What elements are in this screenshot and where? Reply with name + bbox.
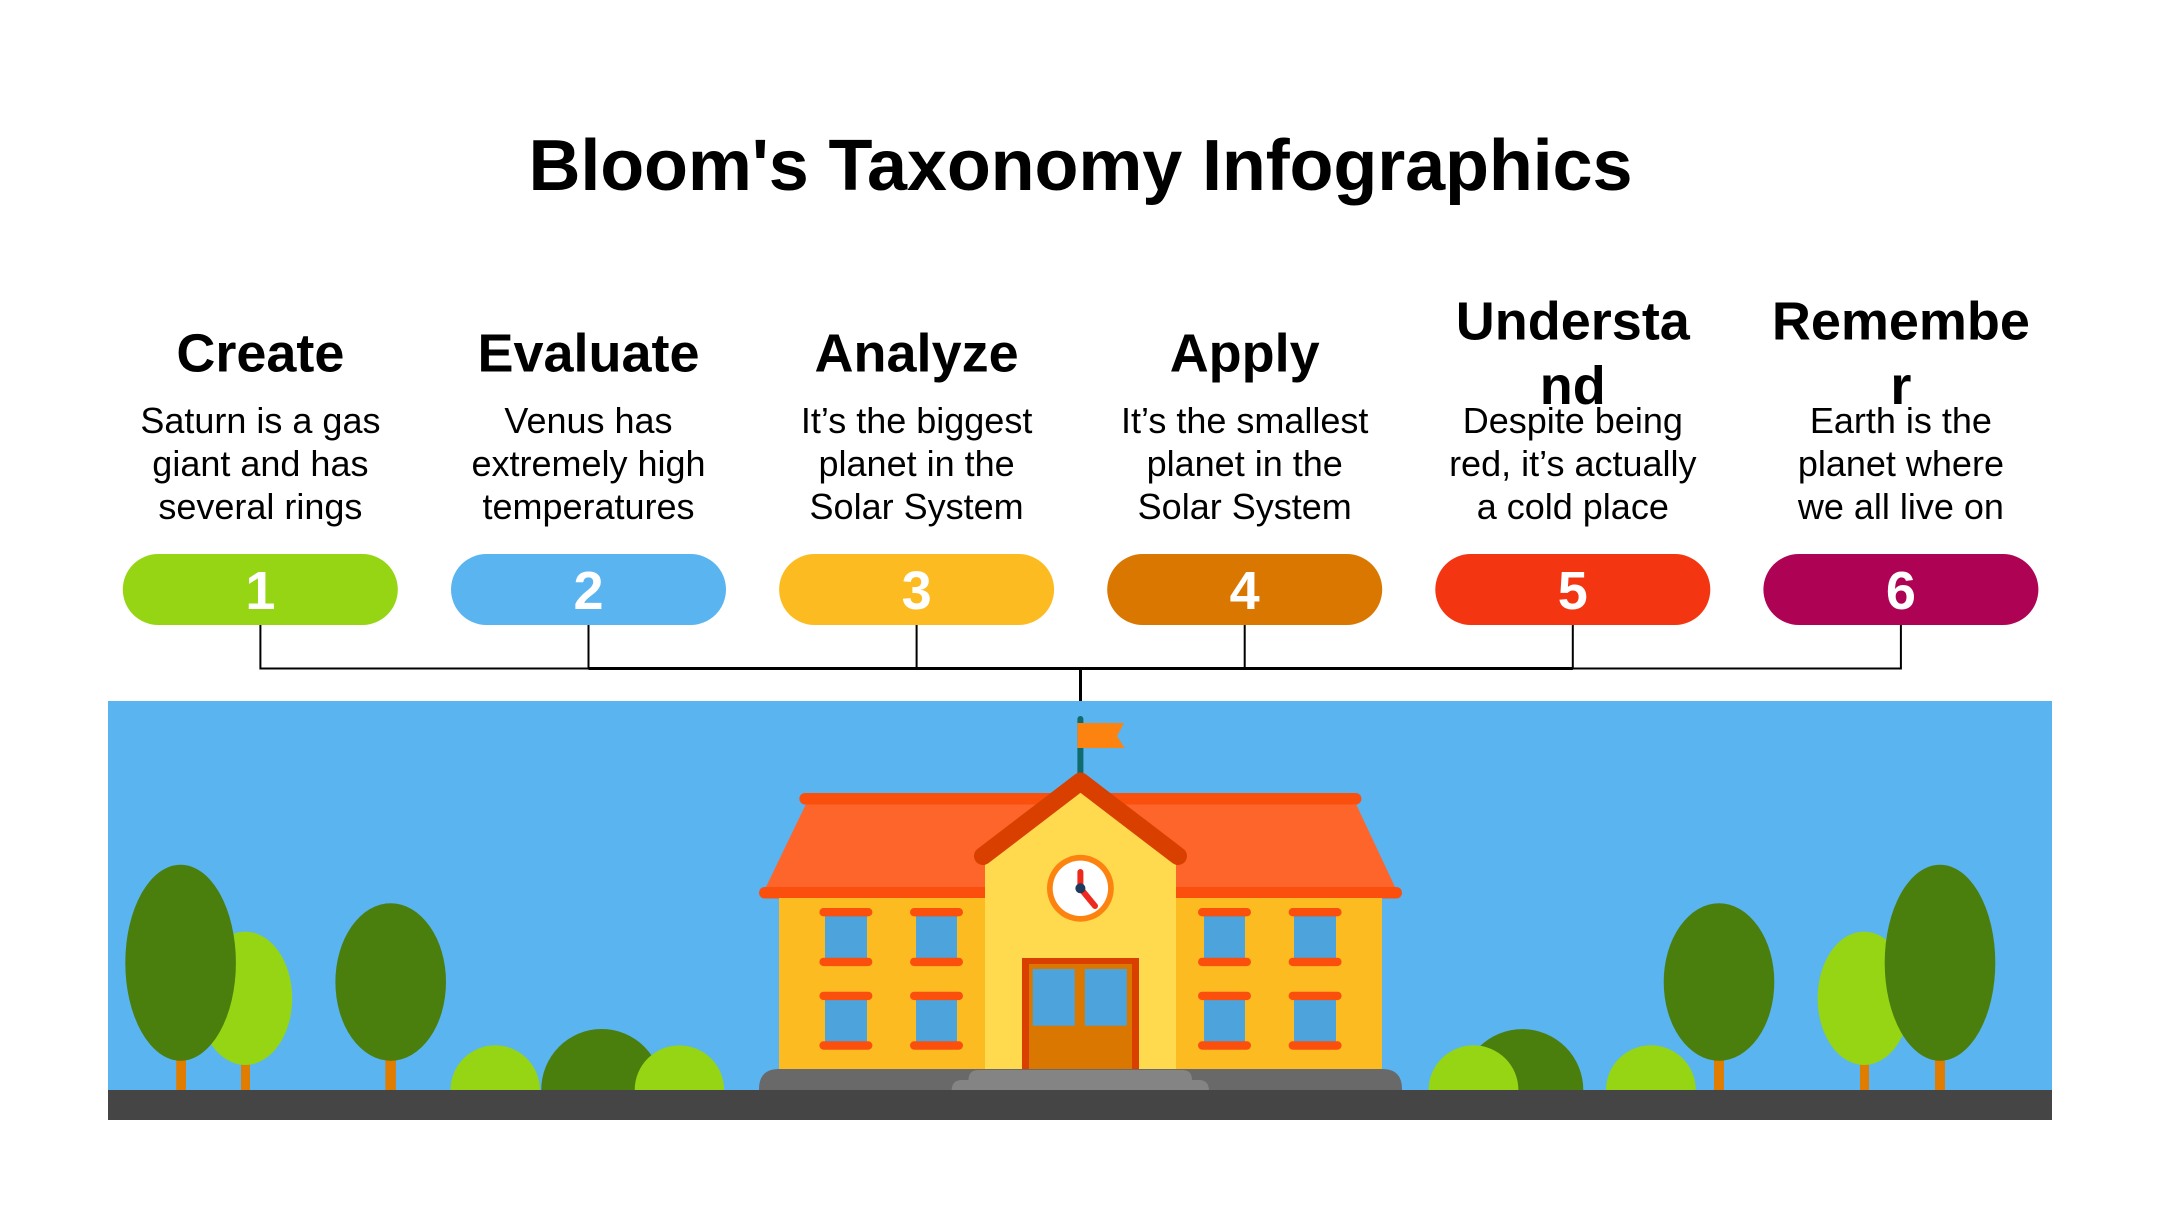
number pill 2 — [451, 554, 726, 625]
number pill 5: 5 — [1558, 561, 1588, 621]
description: Understand: a cold place — [1477, 486, 1669, 527]
door — [1022, 958, 1139, 1070]
description: Apply: planet in the — [1147, 443, 1343, 484]
scene: school with trees — [108, 701, 2052, 1120]
heading: Remember (wrapped): r — [1890, 356, 1911, 416]
tree: medium dark, right — [1664, 903, 1774, 1091]
tree: medium dark, left — [335, 903, 446, 1091]
number pill 3 — [779, 554, 1054, 625]
tree: light, right — [1818, 932, 1910, 1091]
description: Create: giant and has — [152, 443, 368, 484]
description: Evaluate: Venus has — [504, 400, 673, 441]
bush: light — [1606, 1045, 1696, 1091]
connector lines from pills to school scene — [260, 625, 1901, 701]
description: Understand: Despite being — [1463, 400, 1683, 441]
plinth and steps — [759, 1069, 1402, 1091]
description: Remember: planet where — [1798, 443, 2004, 484]
number pill 2: 2 — [573, 561, 604, 621]
tree: light, left — [198, 932, 292, 1091]
column 1: Create — [123, 324, 398, 625]
roof — [759, 793, 1402, 898]
column 4: Apply — [1107, 324, 1382, 625]
bush: light — [450, 1045, 540, 1091]
heading: Apply: Apply — [1170, 324, 1320, 384]
description: Analyze: It’s the biggest — [801, 400, 1032, 441]
description: Evaluate: extremely high — [471, 443, 706, 484]
description: Apply: Solar System — [1138, 486, 1352, 527]
number pill 5 — [1435, 554, 1710, 625]
heading: Evaluate: Evaluate — [477, 324, 700, 384]
windows, four columns by two rows — [819, 908, 1342, 1050]
heading: Understand (wrapped): nd — [1540, 356, 1606, 416]
description: Remember: we all live on — [1797, 486, 2004, 527]
trees and bushes, right — [1429, 865, 1995, 1091]
description: Apply: It’s the smallest — [1121, 400, 1368, 441]
trees and bushes, left — [125, 865, 724, 1091]
ground strip — [108, 1090, 2052, 1120]
number pill 4: 4 — [1230, 561, 1260, 621]
number pill 1 — [123, 554, 398, 625]
description: Remember: Earth is the — [1810, 400, 1992, 441]
sky background — [108, 701, 2052, 1091]
description: Create: several rings — [158, 486, 362, 527]
school building — [759, 716, 1402, 1091]
number pill 1: 1 — [245, 561, 275, 621]
bush: light — [635, 1045, 724, 1091]
description: Analyze: Solar System — [810, 486, 1024, 527]
number pill 6 — [1763, 554, 2038, 625]
icon: clock — [1047, 855, 1114, 922]
column 2: Evaluate — [451, 324, 726, 625]
heading: Create: Create — [176, 324, 344, 384]
wing walls — [779, 898, 1382, 1070]
heading: Remember (wrapped): Remembe — [1772, 292, 2030, 352]
bush: dark — [1461, 1029, 1583, 1091]
heading: Understand (wrapped): Understa — [1456, 292, 1691, 352]
column 5: Understand — [1435, 292, 1710, 625]
number pill 6: 6 — [1886, 561, 1916, 621]
number pill 4 — [1107, 554, 1382, 625]
number pill 3: 3 — [902, 561, 932, 621]
description: Evaluate: temperatures — [482, 486, 695, 527]
title: Bloom's Taxonomy Infographics — [528, 126, 1632, 206]
central tower with gable — [983, 782, 1178, 1070]
tree: tall dark, right — [1885, 865, 1995, 1091]
description: Analyze: planet in the — [819, 443, 1015, 484]
tree: tall dark, left — [125, 865, 236, 1091]
description: Understand: red, it’s actually — [1449, 443, 1697, 484]
bush: dark — [541, 1029, 662, 1091]
heading: Analyze: Analyze — [815, 324, 1019, 384]
column 6: Remember — [1763, 292, 2038, 625]
column 3: Analyze — [779, 324, 1054, 625]
icon: flag on pole — [1077, 716, 1124, 780]
description: Create: Saturn is a gas — [140, 400, 380, 441]
bush: light — [1429, 1045, 1518, 1091]
